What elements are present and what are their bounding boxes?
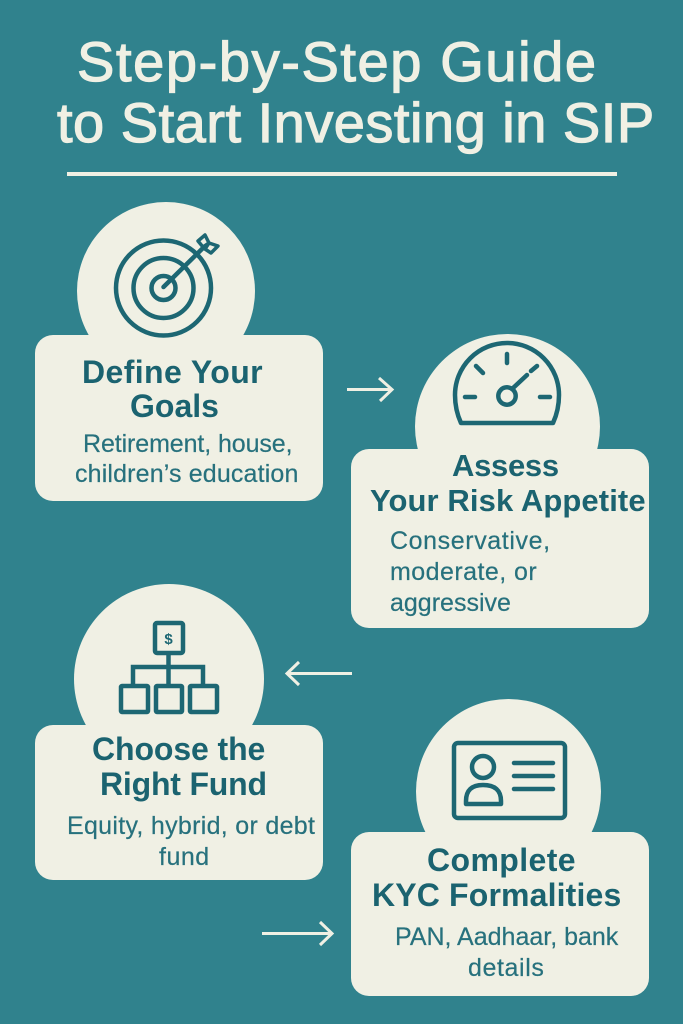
text: goals description: Retirement, house, [83, 430, 292, 458]
panel: complete kyc: KYC Formalities [372, 877, 621, 913]
title [57, 30, 655, 154]
heading: complete kyc formalities: Complete [427, 842, 576, 878]
heading: define your goals: Define Your [82, 354, 263, 390]
panel: choose the right fund: Right Fund [100, 766, 267, 802]
text: fund description: Equity, hybrid, or debt [67, 812, 315, 840]
heading: choose the right fund: Choose the [92, 731, 265, 767]
panel: complete kyc: details [468, 954, 544, 982]
icon: fund hierarchy: $ [164, 631, 173, 648]
text: kyc description: PAN, Aadhaar, bank [395, 923, 618, 951]
arrow: right [347, 377, 394, 402]
panel: assess risk appetite: aggressive [390, 589, 511, 617]
icon: target with arrow [114, 233, 220, 338]
title: to Start Investing in SIP [57, 91, 655, 154]
panel: complete kyc [351, 699, 649, 996]
icon: gauge [452, 340, 562, 426]
panel: define your goals [35, 202, 323, 501]
text: risk description: Conservative, [390, 527, 551, 555]
icon: fund hierarchy [118, 620, 220, 714]
panel: define your goals: children’s education [75, 460, 299, 488]
icon: id card [452, 740, 568, 820]
panel: choose the right fund [35, 584, 323, 880]
panel: assess risk appetite: moderate, or [390, 558, 537, 586]
heading: assess your risk appetite: Assess [452, 448, 559, 483]
panel: define your goals: Goals [130, 388, 219, 424]
title: Step-by-Step Guide [77, 30, 598, 93]
panel: assess risk appetite: Your Risk Appetite [370, 483, 646, 518]
panel: choose the right fund: fund [159, 843, 210, 871]
arrow: right lower [262, 920, 334, 946]
panel: assess risk appetite [351, 334, 649, 628]
arrow: left [284, 660, 352, 686]
